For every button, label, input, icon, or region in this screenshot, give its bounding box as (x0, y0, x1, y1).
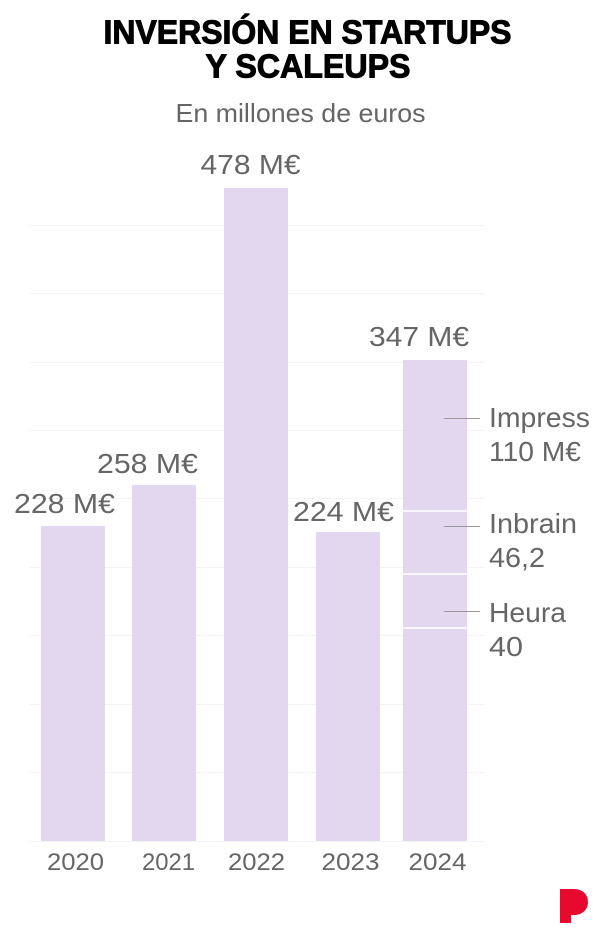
callout: Heura (444, 597, 566, 662)
bar: 2020: 2020 (47, 849, 104, 876)
callout: Impress: Impress (489, 402, 590, 433)
callout: Impress: 110 M€ (489, 436, 581, 467)
bar: 2021: 258 M€ (97, 448, 198, 479)
subtitle: En millones de euros (176, 98, 426, 128)
callout: Impress (444, 402, 590, 467)
bar: 2024: 347 M€ (369, 321, 469, 352)
callout: Heura: 40 (489, 631, 523, 662)
bar: 2024: 2024 (408, 849, 466, 876)
bar: 2021 (97, 448, 198, 876)
callout: Heura: Heura (489, 597, 566, 628)
bar: 2022: 2022 (228, 849, 285, 876)
bar chart (14, 149, 469, 876)
callout: Inbrain: Inbrain (489, 508, 577, 539)
bar: 2024 (369, 321, 469, 876)
bar: 2020: 228 M€ (14, 488, 115, 519)
bar: 2020 (14, 488, 115, 876)
callout: Inbrain (444, 508, 577, 573)
bar: 2023: 2023 (322, 849, 380, 876)
bar: 2022: 478 M€ (200, 149, 301, 180)
icon: logo (560, 889, 588, 923)
bar: 2021: 2021 (142, 849, 195, 876)
title (104, 14, 512, 84)
callout: Inbrain: 46,2 (489, 542, 545, 573)
bar: 2022 (200, 149, 301, 876)
bar: 2023: 224 M€ (293, 496, 394, 527)
title: Y SCALEUPS (206, 48, 410, 84)
title: INVERSIÓN EN STARTUPS (104, 14, 512, 50)
bar: 2023 (293, 496, 394, 876)
